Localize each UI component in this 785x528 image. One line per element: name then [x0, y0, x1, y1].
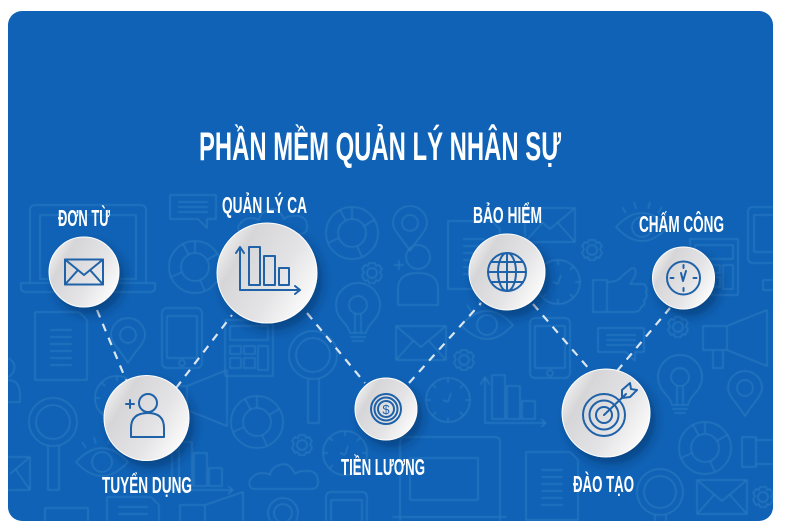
dashed connector path — [97, 303, 670, 388]
icon: add person — [126, 394, 164, 437]
node: Tuyển dụng: TUYỂN DỤNG — [102, 471, 192, 498]
node: Bảo hiểm: BẢO HIỂM — [473, 200, 542, 228]
node: Chấm công: CHẤM CÔNG — [639, 210, 724, 237]
node: Đơn từ — [49, 204, 119, 307]
background pattern of outline icons — [8, 195, 773, 521]
node: Quản lý ca: QUẢN LÝ CA — [222, 190, 307, 218]
icon: target with arrow — [583, 383, 637, 436]
node: Bảo hiểm — [469, 200, 545, 310]
node: Đơn từ: ĐƠN TỪ — [58, 204, 111, 231]
node: Đào tạo: ĐÀO TẠO — [573, 470, 634, 497]
icon: envelope — [65, 260, 103, 284]
icon: coin — [371, 394, 401, 424]
node: Tiền lương — [341, 378, 425, 480]
node: Đào tạo — [562, 369, 650, 497]
node: Chấm công — [639, 210, 724, 309]
icon: bar chart — [236, 247, 300, 294]
icon: clock — [667, 262, 700, 294]
icon: globe — [488, 253, 526, 291]
node: Quản lý ca — [217, 190, 317, 323]
node: Tiền lương: TIỀN LƯƠNG — [341, 453, 425, 480]
node: Tuyển dụng — [102, 376, 192, 498]
dollar sign: $ — [382, 402, 390, 417]
